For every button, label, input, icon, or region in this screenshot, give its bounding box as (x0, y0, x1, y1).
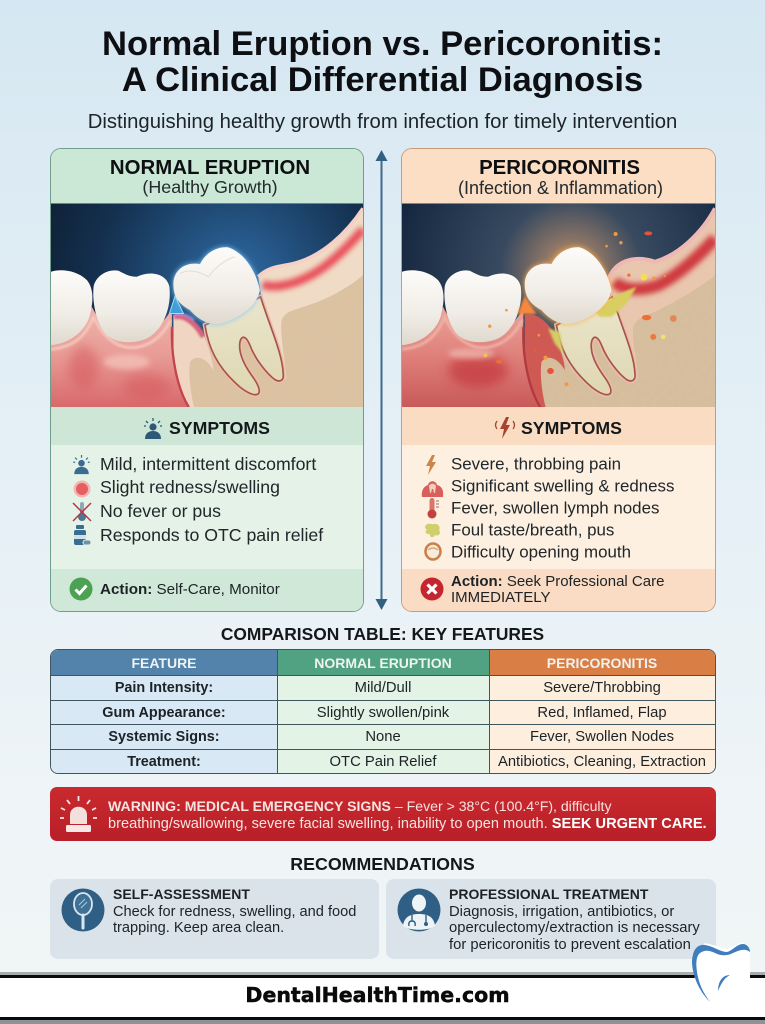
icon: pill bottle (74, 525, 90, 545)
title (102, 25, 663, 99)
icon: swollen gum (422, 481, 444, 497)
row: treatment: Treatment: (127, 754, 201, 770)
text: self-assessment: Check for redness, swelling, and food (113, 904, 356, 920)
warning banner (50, 787, 716, 841)
warning text (108, 798, 707, 832)
action: seek care (402, 569, 715, 612)
row: treatment (51, 749, 715, 770)
icon: hand mirror (62, 888, 104, 932)
row: pain intensity: Mild/Dull (355, 680, 411, 696)
row: pain intensity (51, 675, 715, 696)
icon: red cross (420, 578, 444, 600)
symptoms heading: SYMPTOMS (169, 418, 270, 438)
row: systemic signs: Systemic Signs: (108, 729, 220, 745)
table header (51, 650, 715, 675)
row: pain intensity: Severe/Throbbing (543, 680, 661, 696)
symptom list (72, 454, 324, 545)
symptoms heading (51, 407, 363, 445)
double-headed arrow (376, 150, 388, 610)
subtitle: Distinguishing healthy growth from infection for timely intervention (88, 111, 677, 133)
illustration: healthy erupting molar (51, 204, 363, 407)
icon: crossed thermometer (72, 502, 92, 522)
row: systemic signs (51, 724, 715, 745)
table header: PERICORONITIS (547, 655, 657, 671)
icon: green check (70, 578, 92, 600)
card: professional treatment (386, 879, 716, 959)
icon: doctor (398, 888, 440, 932)
icon: lightning pain (494, 417, 516, 439)
icon: lightning (426, 455, 436, 475)
action: seek care: IMMEDIATELY (451, 589, 550, 606)
text: self-assessment (113, 886, 356, 936)
row: systemic signs: Fever, Swollen Nodes (530, 729, 674, 745)
panel heading: normal eruption (50, 148, 364, 204)
comparison heading: COMPARISON TABLE: KEY FEATURES (221, 624, 544, 644)
symptom list: Fever, swollen lymph nodes (451, 498, 659, 517)
illustration: infected molar (402, 204, 715, 407)
row: gum appearance (51, 700, 715, 720)
panel heading: normal eruption: NORMAL ERUPTION (110, 157, 310, 179)
card: self-assessment (50, 879, 379, 959)
text: professional treatment: for pericoronitis to prevent escalation (449, 937, 691, 953)
text: professional treatment: Diagnosis, irrigation, antibiotics, or (449, 904, 674, 920)
action: seek care: Action: Seek Professional Care (451, 573, 664, 590)
action: self-care: Action: Self-Care, Monitor (100, 581, 280, 598)
row: gum appearance: Slightly swollen/pink (317, 704, 449, 720)
symptom list: Mild, intermittent discomfort (100, 454, 316, 474)
text: self-assessment: SELF-ASSESSMENT (113, 886, 250, 902)
footer band (0, 972, 765, 1024)
symptoms heading: SYMPTOMS (521, 418, 622, 438)
text: self-assessment: trapping. Keep area clean. (113, 920, 284, 936)
logo: tooth (692, 942, 750, 1002)
panel heading: pericoronitis (401, 148, 716, 204)
symptom list: Slight redness/swelling (100, 477, 280, 497)
symptom list: Foul taste/breath, pus (451, 520, 614, 539)
warning text: WARNING: MEDICAL EMERGENCY SIGNS – Fever > 38°C (100.4°F), difficulty (108, 798, 612, 814)
row: gum appearance: Gum Appearance: (102, 704, 226, 720)
panel heading: pericoronitis: (Infection & Inflammation) (458, 178, 663, 198)
row: pain intensity: Pain Intensity: (115, 680, 213, 696)
recommendations heading: RECOMMENDATIONS (290, 854, 475, 874)
icon: emergency siren (60, 796, 97, 832)
panel heading: pericoronitis: PERICORONITIS (479, 157, 640, 179)
comparison table (50, 649, 716, 774)
row: gum appearance: Red, Inflamed, Flap (537, 704, 667, 720)
icon: person (73, 455, 90, 474)
symptom list: Significant swelling & redness (451, 476, 674, 495)
title: A Clinical Differential Diagnosis (122, 61, 643, 99)
text: professional treatment (449, 886, 700, 953)
symptom list: Severe, throbbing pain (451, 454, 621, 473)
panel heading: normal eruption: (Healthy Growth) (142, 177, 278, 197)
text: professional treatment: operculectomy/extraction is necessary (449, 920, 700, 936)
symptom list: No fever or pus (100, 501, 221, 521)
icon: red spot (74, 480, 90, 498)
action: self-care (51, 569, 363, 612)
title: Normal Eruption vs. Pericoronitis: (102, 25, 663, 63)
table header: FEATURE (131, 655, 197, 671)
panel: pericoronitis (401, 148, 716, 612)
row: treatment: OTC Pain Relief (330, 754, 436, 770)
icon: thermometer (428, 498, 439, 518)
symptom list (422, 454, 674, 561)
icon: open mouth (424, 542, 442, 561)
row: treatment: Antibiotics, Cleaning, Extraction (498, 754, 706, 770)
symptom list: Difficulty opening mouth (451, 542, 631, 561)
icon: pus splat (425, 524, 440, 538)
symptom list: Responds to OTC pain relief (100, 525, 323, 545)
table header: NORMAL ERUPTION (314, 655, 452, 671)
icon: person with mild pain (144, 418, 162, 439)
row: systemic signs: None (365, 729, 401, 745)
panel: normal eruption (50, 148, 364, 612)
text: professional treatment: PROFESSIONAL TREATMENT (449, 886, 648, 902)
warning text: breathing/swallowing, severe facial swelling, inability to open mouth. SEEK URGENT CARE. (108, 816, 707, 832)
symptoms heading (402, 407, 715, 445)
footer website: DentalHealthTime.com (245, 983, 510, 1007)
